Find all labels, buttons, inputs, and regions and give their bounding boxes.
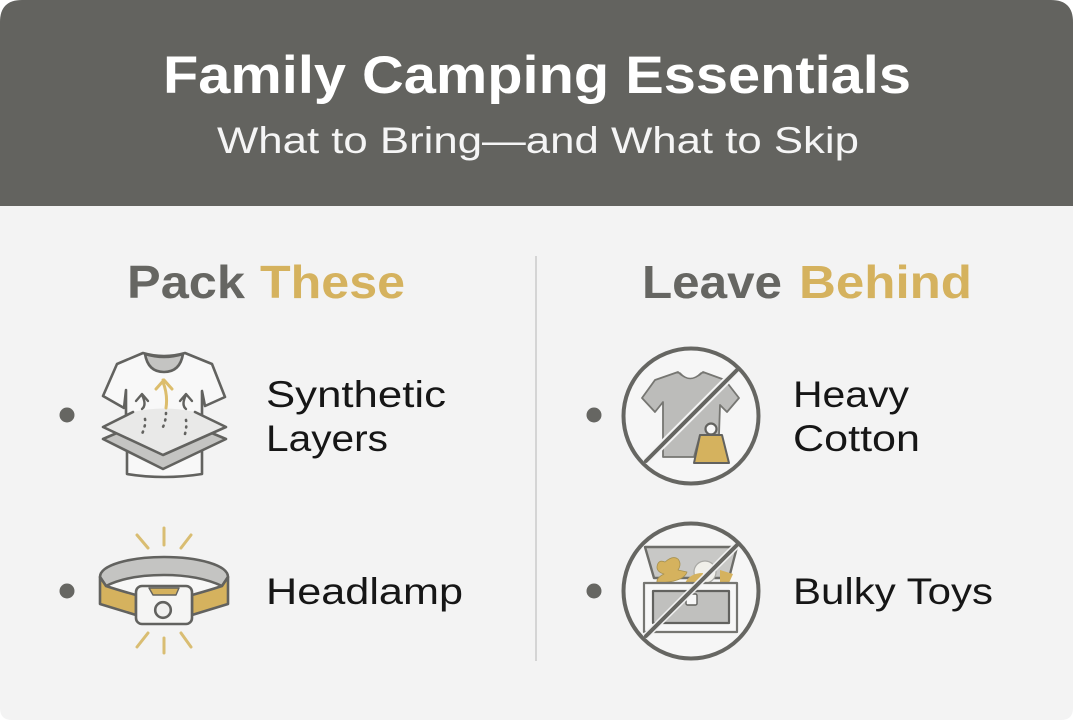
icon: no heavy cotton xyxy=(623,348,759,484)
label: synthetic layers: Layers xyxy=(266,418,388,459)
label: bulky toys: Bulky Toys xyxy=(793,571,993,612)
label: synthetic layers: Synthetic xyxy=(266,374,446,415)
panel: pack these xyxy=(60,256,463,653)
title: Family Camping Essentials xyxy=(163,46,911,105)
label: synthetic layers xyxy=(266,374,446,459)
bullet: headlamp xyxy=(60,584,74,598)
label: heavy cotton: Cotton xyxy=(793,418,920,459)
heading: pack these: These xyxy=(260,256,405,308)
icon: no bulky toys xyxy=(623,523,759,659)
label: headlamp: Headlamp xyxy=(266,571,463,612)
header panel xyxy=(0,0,1073,206)
label: heavy cotton: Heavy xyxy=(793,374,910,415)
header background xyxy=(0,0,1073,206)
label: heavy cotton xyxy=(793,374,920,459)
icon: headlamp xyxy=(100,528,228,653)
panel: leave behind xyxy=(586,256,993,659)
bullet: heavy cotton xyxy=(586,408,602,422)
subtitle: What to Bring—and What to Skip xyxy=(217,120,859,161)
heading: leave behind: Leave xyxy=(642,256,782,308)
bullet: bulky toys xyxy=(586,584,602,598)
heading: leave behind: Behind xyxy=(799,256,972,308)
bullet: synthetic layers xyxy=(60,408,74,422)
icon: t-shirt with layers xyxy=(103,353,226,477)
heading: pack these xyxy=(127,256,405,308)
heading: pack these: Pack xyxy=(127,256,245,308)
heading: leave behind xyxy=(642,256,972,308)
